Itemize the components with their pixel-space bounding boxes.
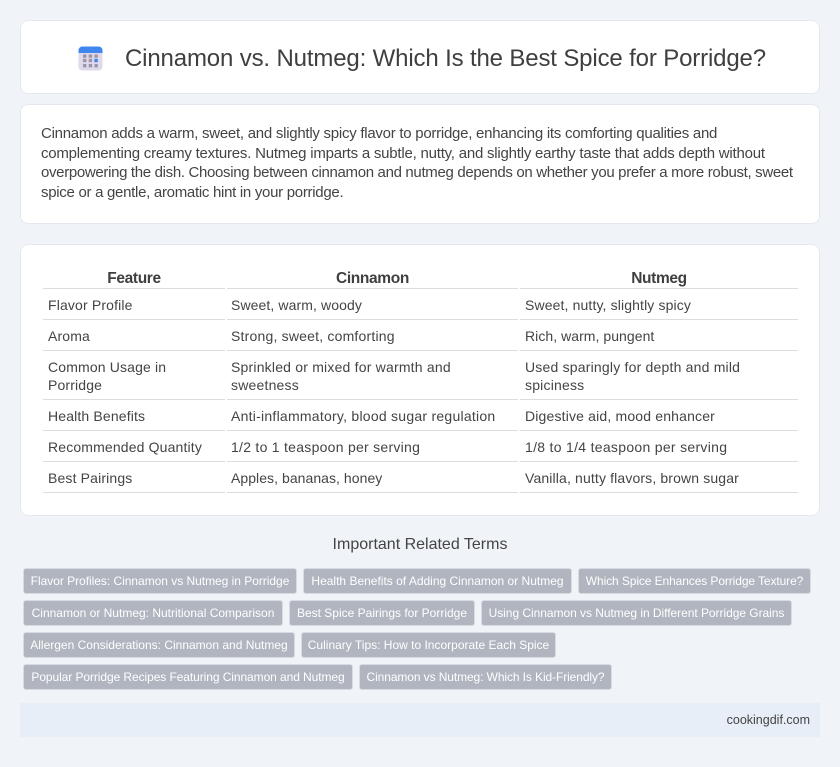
related terms tags: Health Benefits of Adding Cinnamon or Nutmeg — [311, 574, 564, 588]
comparison table: Sweet, nutty, slightly spicy — [525, 297, 691, 313]
icon: calendar — [78, 46, 102, 70]
comparison table: Rich, warm, pungent — [525, 328, 654, 344]
comparison table: Digestive aid, mood enhancer — [525, 408, 715, 424]
intro panel — [20, 104, 820, 224]
related terms tags: Which Spice Enhances Porridge Texture? — [586, 574, 803, 588]
comparison table: Apples, bananas, honey — [231, 470, 382, 486]
comparison table: Recommended Quantity — [48, 439, 202, 455]
intro text: spice or a gentle, aromatic hint in your porridge. — [41, 184, 343, 201]
footer source: cookingdif.com — [727, 713, 810, 727]
related terms tags: Culinary Tips: How to Incorporate Each Spice — [308, 638, 549, 652]
comparison table: sweetness — [231, 377, 299, 393]
comparison table: Health Benefits — [48, 408, 145, 424]
related terms tags: Popular Porridge Recipes Featuring Cinnamon and Nutmeg — [31, 670, 345, 684]
title panel — [20, 20, 820, 94]
comparison table: Cinnamon — [336, 270, 409, 287]
comparison table — [43, 270, 798, 493]
related terms tags: Flavor Profiles: Cinnamon vs Nutmeg in Porridge — [31, 574, 289, 588]
comparison table: 1/8 to 1/4 teaspoon per serving — [525, 439, 727, 455]
footer bar — [20, 703, 820, 737]
related terms tags: Allergen Considerations: Cinnamon and Nutmeg — [30, 638, 288, 652]
comparison table: Vanilla, nutty flavors, brown sugar — [525, 470, 739, 486]
title: Cinnamon vs. Nutmeg: Which Is the Best Spice for Porridge? — [125, 45, 766, 72]
comparison table: Feature — [107, 270, 161, 287]
intro text — [41, 125, 793, 201]
comparison table: Common Usage in — [48, 359, 166, 375]
comparison table: Best Pairings — [48, 470, 132, 486]
comparison table: Aroma — [48, 328, 90, 344]
comparison table: 1/2 to 1 teaspoon per serving — [231, 439, 420, 455]
related terms tags: Best Spice Pairings for Porridge — [297, 606, 467, 620]
related terms tags: Using Cinnamon vs Nutmeg in Different Porridge Grains — [489, 606, 784, 620]
intro text: Cinnamon adds a warm, sweet, and slightly spicy flavor to porridge, enhancing its comforting qualities and — [41, 125, 717, 142]
comparison table: Sweet, warm, woody — [231, 297, 362, 313]
intro text: complementing creamy textures. Nutmeg imparts a subtle, nutty, and slightly earthy taste that adds depth without — [41, 145, 765, 162]
related terms tags: Cinnamon vs Nutmeg: Which Is Kid-Friendly? — [367, 670, 604, 684]
related terms heading: Important Related Terms — [333, 536, 507, 553]
related terms tags — [23, 568, 811, 690]
comparison table: Sprinkled or mixed for warmth and — [231, 359, 451, 375]
related terms tags: Cinnamon or Nutmeg: Nutritional Comparison — [32, 606, 274, 620]
comparison table: spiciness — [525, 377, 584, 393]
comparison table: Flavor Profile — [48, 297, 133, 313]
intro text: overpowering the dish. Choosing between cinnamon and nutmeg depends on whether you prefer a more robust, sweet — [41, 164, 793, 181]
comparison table panel — [20, 244, 820, 516]
comparison table: Anti-inflammatory, blood sugar regulation — [231, 408, 495, 424]
comparison table: Porridge — [48, 377, 102, 393]
comparison table: Used sparingly for depth and mild — [525, 359, 740, 375]
comparison table: Strong, sweet, comforting — [231, 328, 395, 344]
comparison table: Nutmeg — [631, 270, 687, 287]
